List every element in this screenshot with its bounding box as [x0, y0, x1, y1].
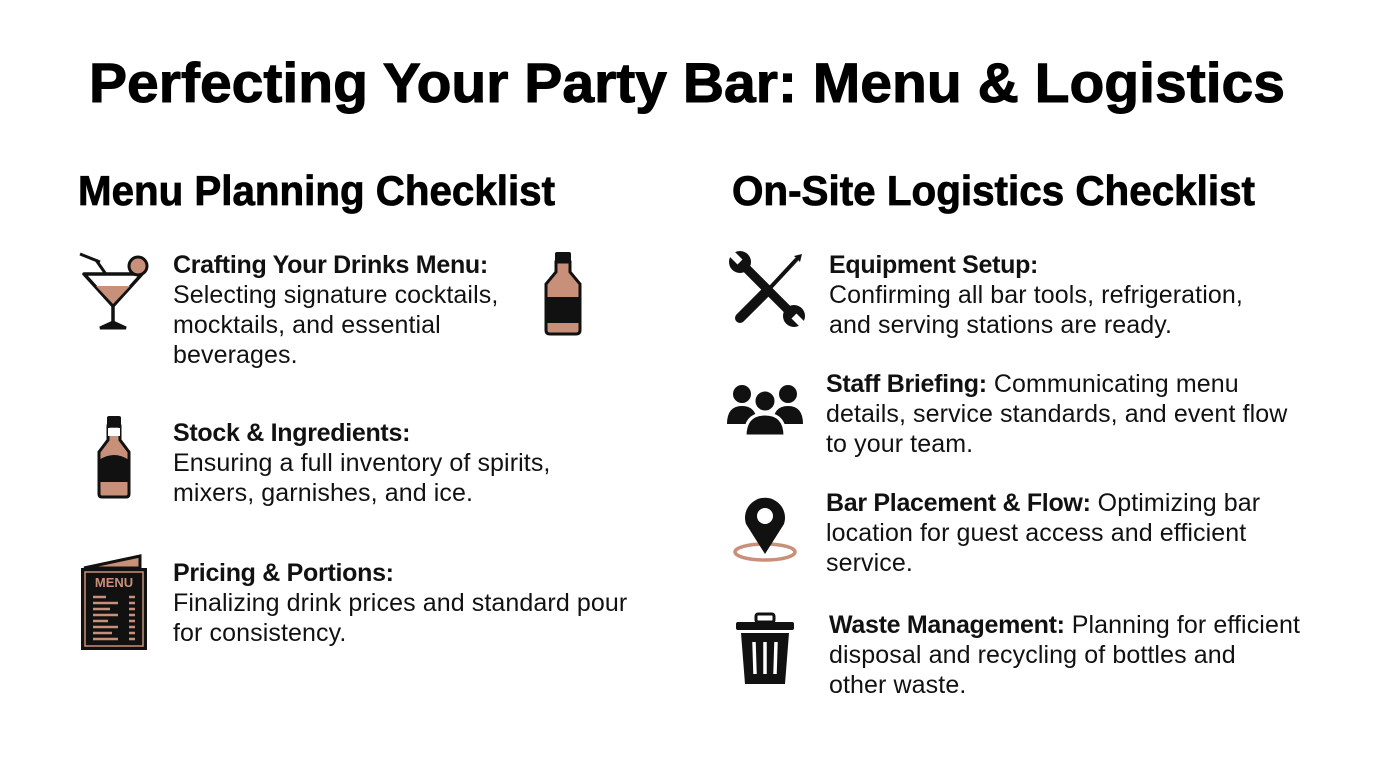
text: stock and ingredients: mixers, garnishes, and ice.: [173, 479, 473, 507]
text: crafting drinks menu: Selecting signature cocktails,: [173, 281, 498, 309]
text: pricing and portions: Finalizing drink prices and standard pour: [173, 589, 627, 617]
text: equipment setup: Confirming all bar tools, refrigeration,: [829, 281, 1243, 309]
icon: location pin: [733, 498, 797, 562]
icon: cocktail glass: [80, 252, 148, 330]
text: equipment setup: and serving stations are ready.: [829, 311, 1172, 339]
text: bar placement: Bar Placement & Flow: Optimizing bar: [826, 489, 1260, 517]
text: waste management: Waste Management: Planning for efficient: [829, 611, 1300, 639]
heading: menu planning: Menu Planning Checklist: [78, 167, 555, 214]
text: crafting drinks menu: [173, 251, 498, 369]
text: bar placement: location for guest access and efficient: [826, 519, 1246, 547]
icon: bottle top: [544, 252, 582, 336]
icon: trash bin: [736, 612, 794, 684]
text: crafting drinks menu: Crafting Your Drinks Menu:: [173, 251, 488, 279]
text: pricing and portions: for consistency.: [173, 619, 346, 647]
text: stock and ingredients: Stock & Ingredients:: [173, 419, 410, 447]
text: waste management: other waste.: [829, 671, 966, 699]
text: crafting drinks menu: mocktails, and essential: [173, 311, 441, 339]
text: staff briefing: Staff Briefing: Communicating menu: [826, 370, 1239, 398]
title: Perfecting Your Party Bar: Menu & Logistics: [89, 51, 1285, 114]
text: staff briefing: details, service standards, and event flow: [826, 400, 1287, 428]
icon: team: [727, 385, 803, 434]
text: bar placement: service.: [826, 549, 913, 577]
icon: bottle: [98, 416, 130, 498]
icon: tools: [729, 251, 805, 327]
text: pricing and portions: [173, 559, 627, 647]
text: equipment setup: Equipment Setup:: [829, 251, 1038, 279]
text: equipment setup: [829, 251, 1243, 339]
text: stock and ingredients: Ensuring a full inventory of spirits,: [173, 449, 550, 477]
text: waste management: [829, 611, 1300, 699]
icon: menu card: MENU: [95, 575, 133, 590]
text: staff briefing: to your team.: [826, 430, 973, 458]
heading: on-site logistics: On-Site Logistics Checklist: [732, 167, 1255, 214]
text: crafting drinks menu: beverages.: [173, 341, 298, 369]
text: staff briefing: [826, 370, 1288, 458]
icon: menu card: [81, 554, 147, 650]
text: bar placement: [826, 489, 1260, 577]
text: waste management: disposal and recycling of bottles and: [829, 641, 1236, 669]
text: pricing and portions: Pricing & Portions:: [173, 559, 394, 587]
text: stock and ingredients: [173, 419, 550, 507]
